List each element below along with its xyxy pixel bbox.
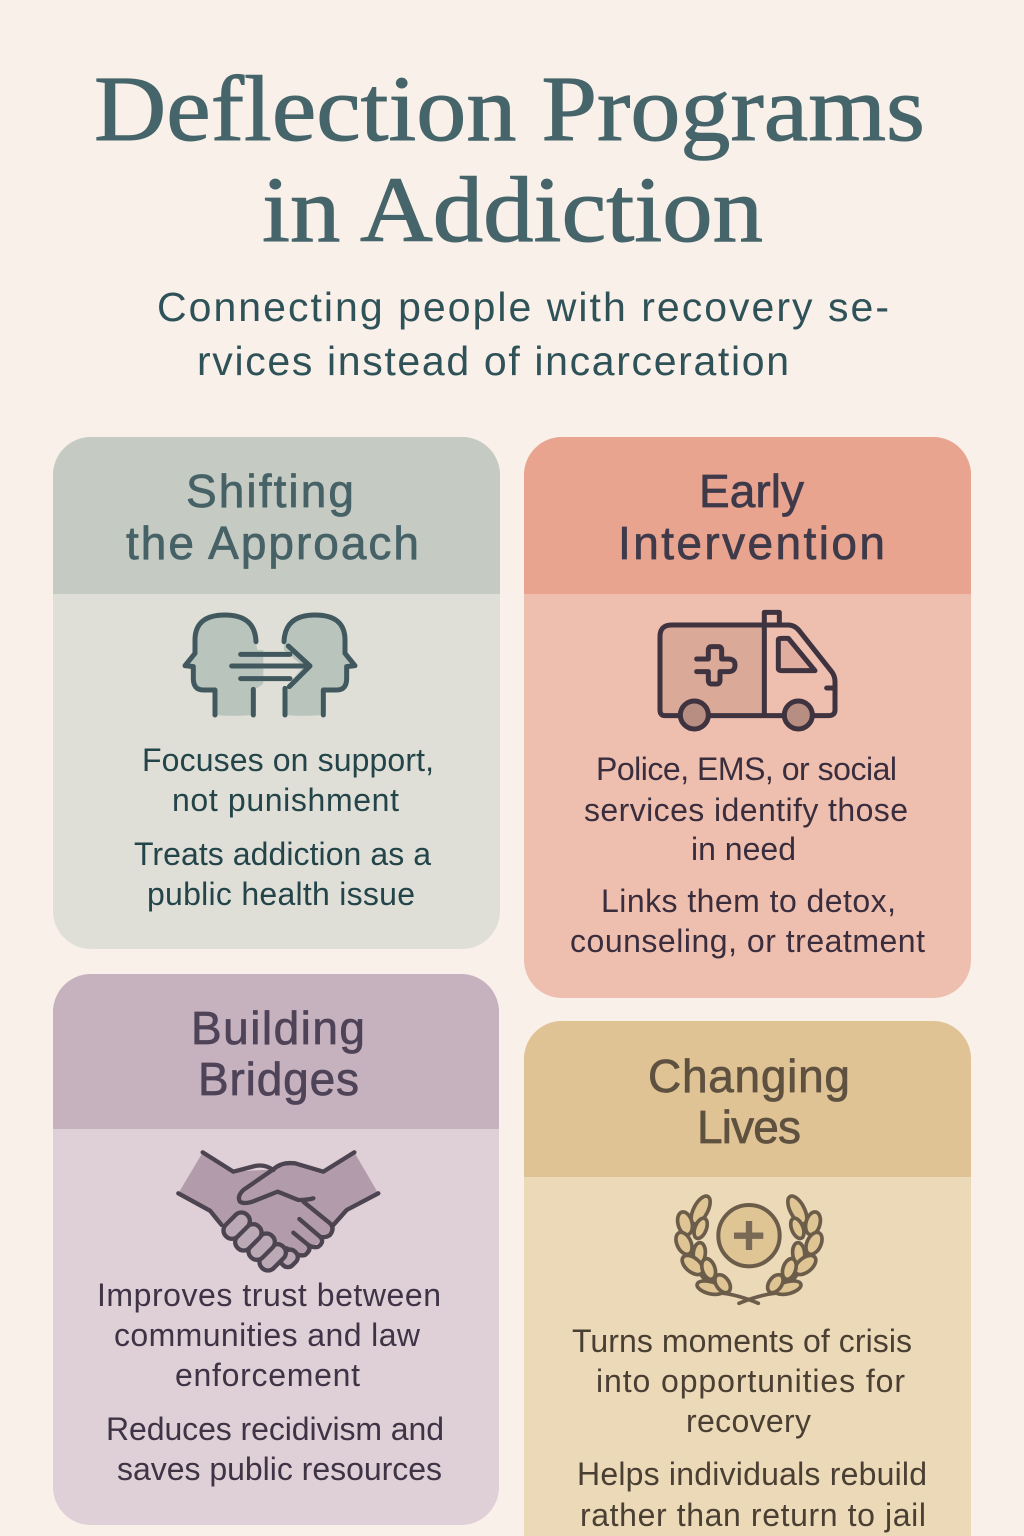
- panel header: building bridges: Building: [191, 1002, 365, 1054]
- panel header: early intervention: [524, 437, 971, 594]
- title: in Addiction: [262, 159, 763, 262]
- text: shifting the approach: Focuses on support,: [142, 742, 434, 778]
- text: building bridges: Improves trust between: [97, 1277, 441, 1313]
- panel header: changing lives: Changing: [648, 1050, 850, 1102]
- icon: ambulance: [660, 612, 835, 729]
- icon: handshake: [178, 1152, 378, 1274]
- text: building bridges: communities and law: [114, 1317, 421, 1353]
- text: changing lives: recovery: [686, 1403, 811, 1439]
- text: changing lives: Turns moments of crisis: [572, 1323, 912, 1359]
- panel header: early intervention: Intervention: [618, 517, 885, 569]
- text: early intervention: Links them to detox,: [601, 883, 896, 919]
- panel header: changing lives: [524, 1021, 971, 1177]
- text: changing lives: Helps individuals rebuild: [577, 1456, 927, 1492]
- panel: building bridges: [53, 974, 499, 1525]
- text: changing lives: [572, 1323, 927, 1533]
- subtitle: Connecting people with recovery se-: [157, 284, 889, 330]
- subtitle: rvices instead of incarceration: [197, 338, 789, 384]
- text: building bridges: saves public resources: [117, 1451, 442, 1487]
- text: shifting the approach: not punishment: [172, 782, 399, 818]
- icon: laurel wreath with medical cross: [673, 1193, 825, 1303]
- panel: early intervention: [524, 437, 971, 998]
- title: Deflection Programs: [94, 58, 925, 161]
- panel header: shifting the approach: [53, 437, 500, 594]
- text: changing lives: rather than return to jail: [580, 1497, 926, 1533]
- text: building bridges: [97, 1277, 444, 1487]
- text: early intervention: [570, 751, 925, 959]
- text: changing lives: into opportunities for: [596, 1363, 905, 1399]
- text: early intervention: Police, EMS, or social: [596, 751, 897, 787]
- panel: shifting the approach: [53, 437, 500, 949]
- text: early intervention: in need: [691, 831, 796, 867]
- icon: two heads with arrow: [185, 615, 355, 716]
- text: shifting the approach: public health issue: [147, 876, 415, 912]
- panel header: shifting the approach: Shifting: [186, 465, 354, 517]
- title: [94, 58, 925, 262]
- panel header: shifting the approach: the Approach: [126, 517, 419, 569]
- panel header: early intervention: Early: [699, 465, 804, 517]
- panel: changing lives: [524, 1021, 971, 1536]
- text: early intervention: services identify those: [584, 792, 908, 828]
- panel header: changing lives: Lives: [697, 1101, 801, 1153]
- panel header: building bridges: Bridges: [198, 1053, 359, 1105]
- panel header: building bridges: [53, 974, 499, 1129]
- text: early intervention: counseling, or treatment: [570, 923, 925, 959]
- text: shifting the approach: Treats addiction as a: [134, 836, 431, 872]
- text: building bridges: Reduces recidivism and: [106, 1411, 444, 1447]
- subtitle: [157, 284, 889, 384]
- text: building bridges: enforcement: [175, 1357, 360, 1393]
- text: shifting the approach: [134, 742, 434, 912]
